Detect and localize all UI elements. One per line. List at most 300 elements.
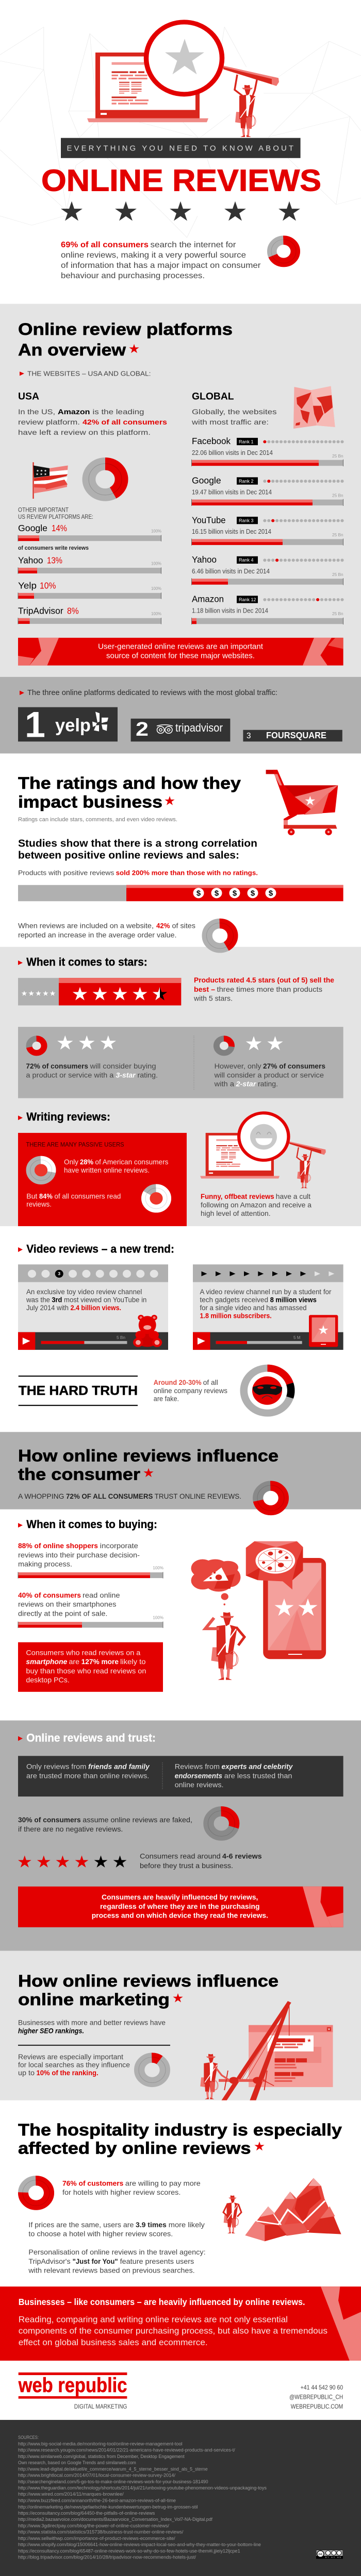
logo: web republic: web republic (18, 2374, 127, 2397)
text: personalisation (28, 2248, 206, 2275)
text: 28%: Only (64, 1158, 79, 1166)
illustration: laptop under magnifying glass with explorer (87, 22, 279, 137)
subheading: writing reviews: Writing reviews: (26, 1111, 110, 1123)
bar: Yelp 10% (18, 581, 162, 599)
text: correlation: between positive online reviews and sales: (18, 850, 239, 861)
heading: the hard truth: THE HARD TRUTH (19, 1384, 138, 1398)
heading (18, 774, 241, 811)
text: funny reviews (201, 1193, 311, 1218)
text: 30% assume fake: 30% of consumers (18, 1817, 81, 1824)
text: 28% (64, 1158, 168, 1175)
callout: smartphone 127%: likely to (120, 1658, 146, 1666)
text: 42% of sites: 42% (156, 922, 170, 930)
label: other platforms: US REVIEW PLATFORMS ARE: (18, 513, 93, 520)
rank 2: tripadvisor (131, 719, 230, 741)
bar: Google 14%: 14% (52, 523, 67, 533)
conclusion body: effect on global business sales and ecommerce. (19, 2337, 208, 2347)
text: 200% more (18, 869, 258, 877)
text: 3.9 times (28, 2221, 205, 2239)
rank 1: yelp (18, 705, 118, 745)
text: 72% trust: TRUST ONLINE REVIEWS. (155, 1493, 241, 1501)
source list: http://searchengineland.com/5-go-tos-to-make-online-reviews-work-for-your-business-181490 (18, 2479, 208, 2484)
rank row: Yahoo: Rank 4 (239, 557, 253, 563)
bar: Google 14%: of consumers write reviews (18, 545, 89, 551)
donut chart: 42% of sites (206, 923, 233, 948)
intro text: search the internet for (150, 241, 236, 249)
panel: trusted sources: friends and family (88, 1763, 150, 1771)
heading (18, 1447, 278, 1484)
panel: trusted sources: Only reviews from (26, 1763, 86, 1771)
callout: smartphone 127%: smartphone (26, 1658, 68, 1666)
text: 27%: will consider a product or service (214, 1072, 324, 1079)
text: 28%: 28% (80, 1158, 93, 1166)
bar: Yelp 10%: Yelp (18, 581, 37, 590)
text: 72% trust (18, 1493, 241, 1501)
contact details: WEBREPUBLIC.COM (291, 2403, 343, 2410)
global column intro: Globally, the websites (192, 408, 277, 416)
text: fake reviews: are fake. (154, 1395, 179, 1403)
callout: smartphone 127% (18, 1642, 163, 1692)
section: when it comes to stars (0, 947, 361, 1226)
contact details: @WEBREPUBLIC_CH (289, 2394, 343, 2400)
rank row: Amazon: 25 Bn (332, 611, 343, 616)
text: SEO rankings: higher SEO rankings. (18, 2027, 84, 2035)
panel: passive users: THERE ARE MANY PASSIVE USERS (26, 1141, 124, 1148)
bar: Yelp 10%: 10% (40, 581, 56, 590)
text with arrow: The three online platforms dedicated to reviews with the most global traffic: (27, 689, 277, 697)
text: 42% of sites: of sites (172, 922, 195, 930)
heading: Online review platforms (18, 320, 233, 339)
panel: trusted sources: are less trusted than (224, 1772, 292, 1780)
source list: http://www.statista.com/statistics/315738/business-trust-number-online-reviews/ (18, 2530, 184, 2534)
text: correlation: Studies show that there is a strong correlation (18, 838, 257, 849)
card: tech channel (193, 1264, 343, 1350)
bar: TripAdvisor 8%: 100% (151, 611, 162, 616)
text: 27%: 27% of consumers (263, 1062, 325, 1071)
donut chart: 72% trust (257, 1485, 284, 1511)
logo: web republic: DIGITAL MARKETING (74, 2403, 127, 2410)
intro text (61, 241, 261, 280)
stat: 88%: making process. (18, 1561, 72, 1568)
text: 4.5 stars: Products rated 4.5 stars (out of 5) sell the (194, 976, 334, 985)
text: 84%: But (26, 1193, 37, 1200)
callout: consumers heavily influenced (18, 1887, 343, 1927)
source list: http://www.similarweb.com/global, statistics from December, Desktop Engagement (18, 2454, 185, 2459)
text: 27%: with a (214, 1080, 234, 1089)
subheading: THE WEBSITES – USA AND GLOBAL: (27, 370, 151, 377)
panel: trusted sources: are trusted more than online reviews. (26, 1772, 149, 1780)
source list: https://econsultancy.com/blog/64450-the-pitfalls-of-online-reviews (18, 2511, 155, 2516)
source list (18, 2435, 267, 2560)
text: 28%: have written online reviews. (64, 1166, 150, 1175)
conclusion headline: Businesses – like consumers – are heavily influenced by online reviews. (19, 2297, 305, 2307)
bar chart: sales with dollar icons: $ (269, 890, 273, 897)
USA column intro: 42% of all consumers (83, 418, 167, 427)
rank row: YouTube (191, 515, 344, 546)
panel: trusted sources: endorsements (175, 1772, 222, 1780)
callout: smartphone 127%: 127% more (81, 1658, 119, 1666)
text: local searches: 10% of the ranking. (36, 2069, 99, 2077)
text: fake reviews: of all (203, 1379, 218, 1387)
section: header (0, 0, 361, 304)
rank 1: yelp: yelp (55, 715, 91, 735)
card: toy channel: July 2014 with (26, 1304, 69, 1312)
rank row: YouTube: 16.15 billion visits in Dec 2014 (192, 528, 271, 535)
rank row: Facebook (191, 436, 344, 466)
rank row: Yahoo: Yahoo (192, 555, 217, 565)
text: funny reviews: Funny, offbeat reviews (201, 1193, 274, 1201)
callout: user-generated reviews: source of content for these major websites. (106, 652, 255, 660)
source list: http://www.theguardian.com/technology/shortcuts/2014/jul/21/unboxing-youtube-phenomenon-videos-unpackaging-toys (18, 2485, 267, 2490)
rank row: YouTube: 25 Bn (332, 532, 343, 537)
text: SEO rankings: Businesses with more and better reviews have (18, 2019, 166, 2027)
text: 76% of customers (62, 2180, 201, 2197)
section: hospitality industry (0, 2100, 361, 2286)
stat: 88%: incorporate (100, 1542, 138, 1550)
stat: 40% (18, 1591, 164, 1628)
illustration: explorer and mountains (223, 2178, 341, 2241)
section: online reviews and trust (0, 1720, 361, 1951)
callout: consumers heavily influenced: regardless of where they are in the purchasing (100, 1903, 260, 1911)
panel: trusted sources (18, 1756, 343, 1797)
rank row: Google: Rank 2 (239, 479, 253, 484)
bar: Google 14%: 100% (151, 529, 162, 533)
contact details: +41 44 542 90 60 (301, 2384, 343, 2391)
bar chart: sales with dollar icons: $ (215, 890, 219, 897)
source list: http://media2.bazaarvoice.com/documents/Bazaarvoice_Conversation_Index_Vol7-NA-Digital.pdf (18, 2517, 212, 2522)
bar: Google 14% (18, 523, 162, 551)
text: 30% assume fake (18, 1817, 192, 1834)
stat: 40%: read online (83, 1591, 120, 1600)
bar: TripAdvisor 8% (18, 606, 162, 624)
text: personalisation: feature presents users (120, 2258, 194, 2266)
rank 2: tripadvisor: tripadvisor (175, 722, 223, 734)
rank 3: foursquare: FOURSQUARE (266, 731, 326, 740)
heading: An overview (18, 341, 126, 360)
panel: passive users (18, 1133, 187, 1226)
source list: http://www.3gdirectpay.com/blog/the-power-of-online-customer-reviews/ (18, 2523, 169, 2528)
stars: 4-6 reviews (18, 1855, 127, 1868)
illustration: laptop with smiley magnifier (200, 1113, 326, 1188)
card: toy channel: 2.4 billion views. (71, 1304, 121, 1312)
source list: http://www.shopify.com/blog/15006641-how-online-reviews-impact-local-seo-and-why-they-matter-to-your-bottom-line (18, 2542, 261, 2547)
card: toy channel (18, 1264, 168, 1350)
text: local searches: up to (18, 2069, 35, 2077)
text: 42% of sites: reported an increase in the average order value. (18, 931, 176, 939)
section: how reviews influence the consumer (0, 1432, 361, 1510)
text: 76% of customers: 76% of customers (62, 2180, 123, 2188)
section: how reviews influence online marketing (0, 1951, 361, 2100)
donut chart: 76% (23, 2180, 50, 2206)
bar: Yelp 10%: 100% (151, 586, 162, 591)
text: 30% assume fake: if there are no negative reviews. (18, 1825, 123, 1834)
text: 72%: 72% of consumers (26, 1062, 88, 1071)
stat: 88%: reviews into their purchase decision- (18, 1551, 140, 1560)
text: 3.9 times: to choose a hotel with higher review scores. (28, 2230, 173, 2239)
text: 4-6 reviews: Consumers read around (140, 1853, 221, 1861)
bar: Yahoo 13%: 13% (47, 555, 62, 566)
global column intro: with most traffic are: (191, 418, 269, 427)
caption: Ratings can include stars, comments, and even video reviews. (18, 817, 177, 823)
rank row: Amazon: Amazon (192, 594, 224, 604)
text: 72% trust: 72% OF ALL CONSUMERS (66, 1493, 153, 1501)
text: 42% of sites (18, 922, 195, 939)
rank 3: foursquare (243, 730, 342, 741)
card: toy channel: 3 (58, 1271, 60, 1276)
bar: TripAdvisor 8%: TripAdvisor (18, 606, 63, 616)
intro text: online reviews, making it a very powerful source (61, 251, 246, 260)
panel: trusted sources: experts and celebrity (221, 1763, 293, 1771)
text: 84% (26, 1193, 121, 1209)
callout: user-generated reviews: User-generated online reviews are an important (98, 643, 263, 651)
stat: 40%: directly at the point of sale. (18, 1610, 107, 1618)
callout: smartphone 127%: buy than those who read reviews on (26, 1667, 146, 1675)
rank 1: yelp: 1 (25, 705, 45, 745)
text: local searches: Reviews are especially important (18, 2053, 123, 2061)
text: 3.9 times: 3.9 times (136, 2221, 167, 2229)
USA column intro: review platform. (18, 418, 80, 427)
source list: https://econsultancy.com/blog/65487-online-reviews-work-so-why-do-so-few-hotels-use-them#i.jjieiy12ljcpe1 (18, 2548, 240, 2553)
icon: creative commons badge: cc (319, 2553, 322, 2556)
text: funny reviews: have a cult (276, 1193, 310, 1201)
section: top three review platforms (0, 677, 361, 753)
intro text: behaviour and purchasing processes. (61, 272, 205, 280)
text: 42% of sites: When reviews are included on a website, (18, 922, 154, 930)
source list: SOURCES: (18, 2435, 39, 2440)
rank row: Facebook: Rank 1 (239, 439, 253, 444)
rank 2: tripadvisor: 2 (136, 719, 149, 740)
two stars (246, 1036, 283, 1050)
intro text: 69% of all consumers (61, 241, 149, 249)
text: 30% assume fake: assume online reviews are faked, (83, 1817, 192, 1824)
donut chart: 72% (29, 1039, 44, 1053)
icon: shopping cart (266, 770, 338, 835)
text: 200% more: Products with positive reviews (18, 869, 114, 877)
stat: 88% (18, 1542, 164, 1579)
section: conclusion band (0, 2286, 361, 2361)
donut chart with masked face (244, 1368, 291, 1413)
rank row: Yahoo: 6.46 billion visits in Dec 2014 (192, 567, 270, 575)
section: online review platforms (0, 304, 361, 677)
intro text: of information that has a major impact on consumer (61, 261, 261, 270)
text: 27% (214, 1062, 325, 1089)
USA column intro: have left a review on this platform. (18, 429, 151, 437)
source list: http://onlinemarketing.de/news/gefaelschte-kundenbewertungen-betrug-im-grossen-stil (18, 2504, 198, 2510)
callout: consumers heavily influenced: Consumers are heavily influenced by reviews, (102, 1893, 258, 1902)
heading: online marketing (18, 1991, 170, 2009)
text: 28%: of American consumers (95, 1158, 168, 1166)
subheading: When it comes to stars: (26, 956, 147, 968)
text: 27%: However, only (215, 1062, 262, 1071)
text: 4-6 reviews: before they trust a business. (140, 1862, 233, 1870)
bar chart: sales with dollar icons: $ (196, 890, 201, 897)
text: personalisation: TripAdvisor's (28, 2258, 71, 2266)
rank row: YouTube: Rank 3 (239, 518, 253, 523)
USA column intro: is the leading (92, 408, 144, 416)
text: 76% of customers: for hotels with higher review scores. (62, 2189, 180, 2197)
global column intro: GLOBAL (192, 391, 234, 402)
icon: creative commons badge: BY NC ND (325, 2556, 341, 2558)
text: SEO rankings (18, 2019, 166, 2035)
USA column intro: In the US, (18, 408, 55, 416)
heading: impact business (18, 793, 162, 811)
bar chart: sales with dollar icons (18, 885, 343, 901)
donut chart: 27% (217, 1039, 232, 1053)
rank row: Google: 25 Bn (332, 493, 343, 498)
text: fake reviews: Around 20-30% (154, 1379, 202, 1387)
callout: smartphone 127%: desktop PCs. (26, 1676, 70, 1685)
label: other platforms (18, 506, 93, 520)
donut chart: 69% (271, 240, 296, 263)
icon: creative commons badge (316, 2550, 343, 2559)
bar chart: sales with dollar icons: $ (233, 890, 237, 897)
USA column intro: USA (18, 391, 39, 402)
text: personalisation: "Just for You" (73, 2258, 118, 2266)
card: toy channel: 3rd (52, 1296, 62, 1304)
text: 3.9 times: more likely (169, 2221, 205, 2229)
text: fake reviews (154, 1379, 227, 1403)
subheading: Online reviews and trust: (26, 1732, 156, 1744)
label: other platforms: OTHER IMPORTANT (18, 506, 69, 513)
rank row: Google: 19.47 billion visits in Dec 2014 (192, 488, 272, 496)
text: local searches (18, 2053, 130, 2077)
bar: Yahoo 13% (18, 555, 162, 574)
source list: http://blog.tripadvisor.com/blog/2014/10/28/tripadvisor-now-recommends-hotels-just/ (18, 2555, 196, 2560)
rank 3: foursquare: 3 (247, 731, 251, 740)
heading: How online reviews influence (18, 1972, 278, 1991)
bar: Yahoo 13%: 100% (151, 561, 162, 566)
icon: cart star (305, 796, 315, 805)
text: 72% trust: A WHOPPING (18, 1493, 64, 1501)
source list: http://www.wired.com/2014/11/marques-brownlee/ (18, 2492, 124, 2497)
donut chart: 28% (30, 1160, 52, 1180)
text: 84%: 84% (39, 1193, 53, 1200)
rank row: Google (191, 476, 344, 506)
stat: 88%: 88% of online shoppers (18, 1542, 98, 1550)
stat: 40%: reviews on their smartphones (18, 1601, 116, 1609)
heading: affected by online reviews (18, 2139, 251, 2158)
title: ONLINE REVIEWS (41, 163, 321, 197)
card: toy channel: An exclusive toy video review channel (26, 1288, 142, 1296)
section: ratings and impact (18, 770, 343, 939)
card: toy channel: 5 Bn (117, 1335, 125, 1340)
heading (18, 1972, 278, 2009)
rank row: YouTube: YouTube (192, 515, 225, 525)
source list: Own research, based on Google Trends and similarweb.com (18, 2460, 136, 2465)
logo: web republic (18, 2372, 127, 2410)
callout: consumers heavily influenced: process and on which device they read the reviews. (92, 1912, 268, 1920)
rank row: Yahoo: 25 Bn (332, 572, 343, 577)
heading (18, 2121, 342, 2158)
source list: http://www.research.yougov.com/news/2014/01/22/21-americans-have-reviewed-products-and-services-t/ (18, 2448, 235, 2453)
star rating bar (18, 978, 181, 1006)
rank row: Facebook: 22.06 billion visits in Dec 2014 (192, 449, 273, 456)
callout: user-generated reviews (18, 638, 343, 666)
source list: http://www.buzzfeed.com/annanorth/the-26-best-amazon-reviews-of-all-time (18, 2498, 176, 2503)
text: 4-6 reviews: 4-6 reviews (222, 1853, 262, 1861)
subtitle bar (61, 138, 301, 158)
icon: tablet (309, 1315, 338, 1347)
card: tech channel: 8 million views (270, 1296, 317, 1304)
section: sources (0, 2420, 361, 2576)
icon: american flag (32, 462, 68, 499)
rank row: Amazon (191, 594, 344, 624)
text: 4.5 stars: best – (194, 986, 215, 994)
text: 4-6 reviews (140, 1853, 262, 1870)
donut chart: 84% (145, 1188, 167, 1209)
card: tech channel: for a single video and has amassed (200, 1304, 307, 1312)
bar chart: sales with dollar icons: $ (251, 890, 255, 897)
text: 27%: rating. (258, 1080, 278, 1089)
subheading: Video reviews – a new trend: (26, 1243, 174, 1255)
section: when it comes to buying (0, 1510, 361, 1720)
stat: 40%: 100% (153, 1615, 164, 1620)
panel: trusted sources: Reviews from (175, 1763, 220, 1771)
USA column intro (18, 391, 167, 437)
stat: 40%: 40% of consumers (18, 1591, 81, 1600)
subtitle bar: EVERYTHING YOU NEED TO KNOW ABOUT (67, 145, 293, 152)
heading: How online reviews influence (18, 1447, 278, 1465)
text: 27%: 2-star (236, 1080, 257, 1089)
card: toy channel: was the (26, 1296, 50, 1304)
card: tech channel: 1.8 million subscribers. (200, 1312, 272, 1320)
rank row: Yahoo (191, 555, 344, 585)
icon: world map (293, 386, 335, 429)
callout: smartphone 127%: are (69, 1658, 79, 1666)
text: 4.5 stars: with 5 stars. (193, 995, 233, 1003)
icon: teddy bear (133, 1315, 162, 1347)
text: 4.5 stars: three times more than products (217, 986, 322, 994)
three stars (57, 1036, 116, 1049)
text: 3.9 times: If prices are the same, users are (28, 2221, 134, 2229)
callout: smartphone 127%: Consumers who read reviews on a (26, 1649, 140, 1657)
conclusion body (19, 2315, 327, 2347)
text: local searches: for local searches as they influence (18, 2061, 130, 2069)
card: tech channel: tech gadgets received (200, 1296, 268, 1304)
rank row: Amazon: 1.18 billion visits in Dec 2014 (192, 607, 268, 614)
text: personalisation: with relevant reviews based on previous searches. (28, 2267, 195, 2275)
text: 72%: a product or service with a (26, 1072, 114, 1079)
text: 72% (26, 1062, 158, 1079)
text: 84%: reviews. (26, 1200, 52, 1209)
bar: Google 14%: Google (18, 523, 47, 533)
donut chart: 30% (208, 1811, 235, 1836)
text: 76% of customers: are willing to pay more (125, 2180, 201, 2188)
conclusion body: components of the consumer purchasing process, but also have a tremendous (19, 2326, 327, 2336)
bar: Yahoo 13%: Yahoo (18, 555, 43, 566)
source list: http://www.brightlocal.com/2014/07/01/local-consumer-review-survey-2014/ (18, 2473, 175, 2478)
heading (18, 320, 233, 360)
text: 84%: of all consumers read (54, 1193, 121, 1200)
card: tech channel: 5 M (293, 1335, 301, 1340)
donut chart: 10% (139, 2057, 166, 2082)
text: correlation (18, 838, 257, 861)
bar: TripAdvisor 8%: 8% (67, 606, 79, 616)
panel: 3-star and 2-star comparison (18, 1027, 343, 1098)
conclusion body: Reading, comparing and writing online reviews are not only essential (19, 2315, 288, 2324)
text: 4.5 stars (193, 976, 334, 1003)
rank row: Facebook: 25 Bn (332, 453, 343, 459)
illustration: crane lifting search result (200, 2001, 333, 2100)
card: toy channel: most viewed on YouTube in (64, 1296, 146, 1304)
text: 72%: 3-star (116, 1072, 136, 1079)
panel: trusted sources: online reviews. (175, 1782, 223, 1789)
text: funny reviews: following on Amazon and receive a (201, 1201, 311, 1210)
USA column intro: Amazon (58, 408, 90, 416)
text: 72%: will consider buying (90, 1062, 156, 1071)
source list: http://www.sellwithwp.com/importance-of-product-reviews-ecommerce-site/ (18, 2536, 175, 2541)
subheading: When it comes to buying: (26, 1518, 157, 1531)
